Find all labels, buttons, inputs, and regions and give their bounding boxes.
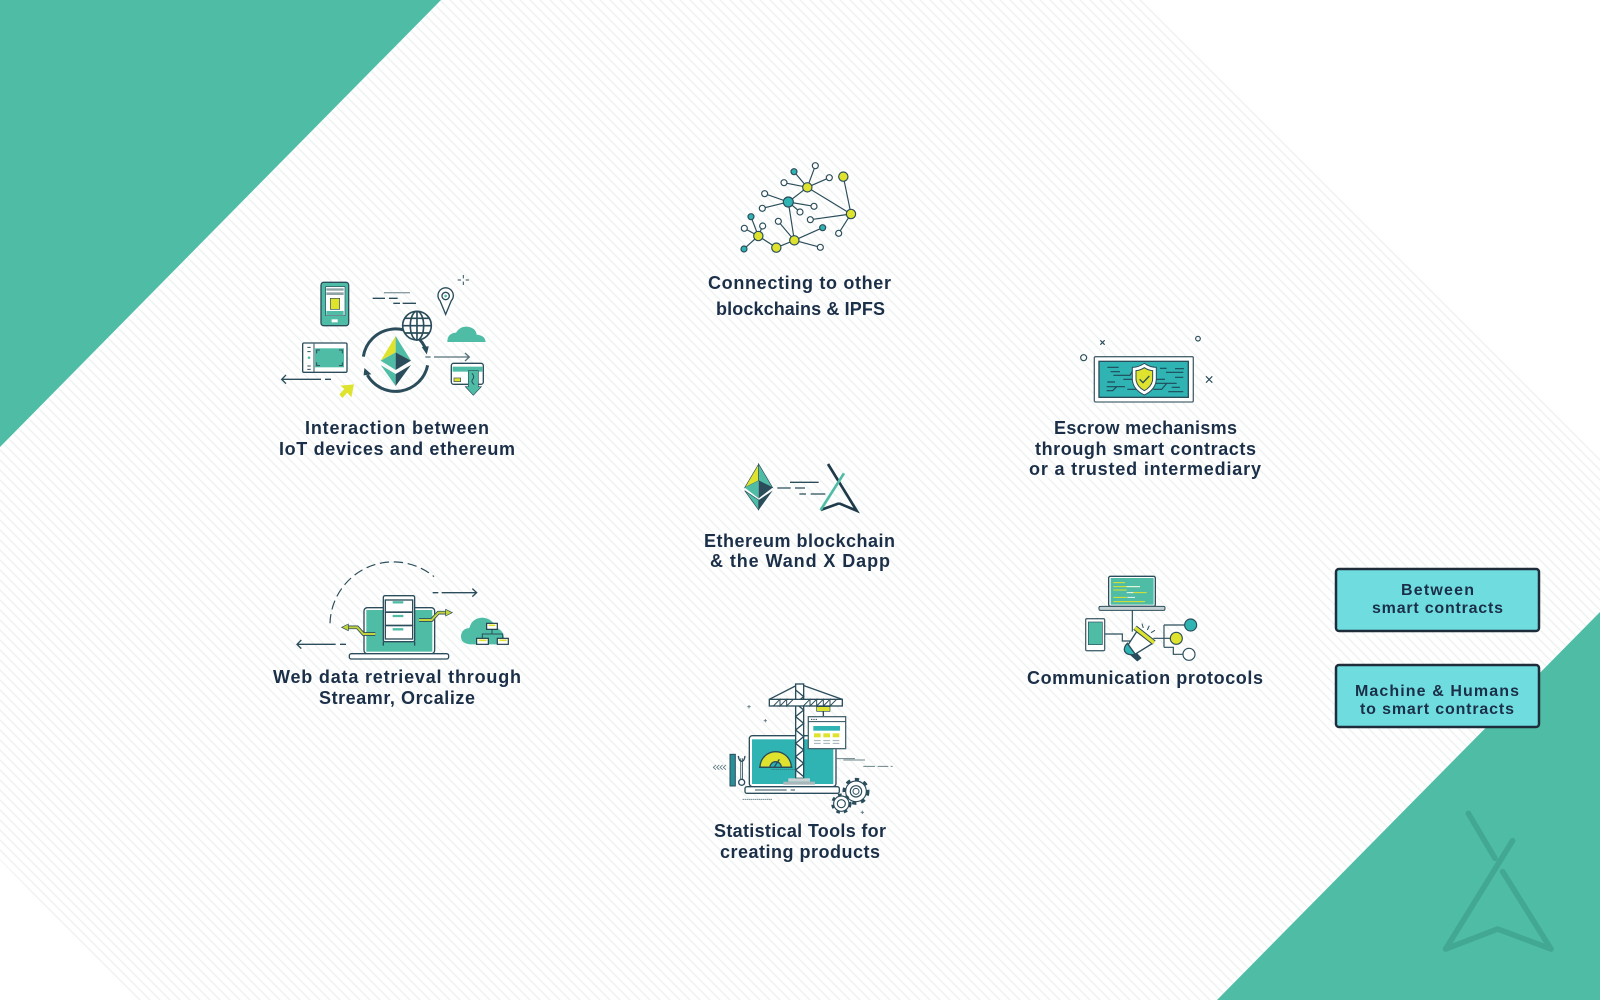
browser window <box>808 717 846 749</box>
text: escrow: Escrow mechanisms <box>1054 418 1237 438</box>
icon: communication protocols <box>1086 576 1197 661</box>
icon: statistical tools <box>713 684 893 814</box>
text: Ethereum blockchain: Ethereum blockchain <box>704 531 895 551</box>
text: IoT interaction: Interaction between <box>305 418 489 438</box>
dashed arc <box>330 562 434 623</box>
speed lines <box>373 293 416 303</box>
text: connecting: Connecting to other <box>708 273 891 293</box>
text: connecting: blockchains & IPFS <box>716 299 885 319</box>
ethereum diamond <box>745 464 773 510</box>
watermark logo <box>1446 813 1551 949</box>
file cabinet <box>383 596 415 646</box>
olive arrows <box>342 609 452 634</box>
icon: web data retrieval <box>297 562 508 659</box>
Wand X logo <box>821 464 857 511</box>
yellow arrow <box>339 384 354 398</box>
edges <box>744 166 851 249</box>
icon: IoT and ethereum <box>282 275 486 398</box>
text: IoT interaction: IoT devices and ethereum <box>279 439 515 459</box>
box: between smart contracts: smart contracts <box>1372 600 1503 617</box>
text: statistical tools: Statistical Tools for <box>714 821 886 841</box>
text: Ethereum blockchain: & the Wand X Dapp <box>710 551 890 571</box>
text: connecting <box>708 273 891 319</box>
text: web data: Streamr, Orcalize <box>319 688 475 708</box>
phone <box>321 282 349 326</box>
card <box>451 363 483 395</box>
connector lines <box>1105 610 1185 654</box>
corner triangle: bottom right <box>1217 612 1600 1000</box>
box: between smart contracts: Between <box>1401 582 1474 599</box>
box: machine and humans: to smart contracts <box>1360 701 1514 718</box>
text: web data: Web data retrieval through <box>273 667 521 687</box>
text: escrow: or a trusted intermediary <box>1029 459 1261 479</box>
globe <box>403 311 431 340</box>
cloud with chart <box>461 618 508 644</box>
icon: ethereum and Wand X <box>745 464 857 511</box>
phone <box>1086 619 1105 651</box>
decorations <box>1081 336 1212 383</box>
gauge <box>759 752 797 769</box>
text: IoT interaction <box>279 418 515 459</box>
lines and marks <box>837 759 893 766</box>
text: escrow <box>1029 418 1261 479</box>
gears <box>832 779 868 813</box>
text: web data <box>273 667 521 708</box>
location pin <box>438 288 453 314</box>
megaphone <box>1124 624 1155 661</box>
box: machine and humans <box>1336 665 1539 727</box>
box: machine and humans: Machine & Humans <box>1355 683 1519 700</box>
circles <box>1170 619 1197 660</box>
device <box>303 343 347 372</box>
text: Ethereum blockchain <box>704 531 895 571</box>
laptop <box>349 608 449 659</box>
laptop <box>745 736 839 793</box>
cloud <box>447 327 486 342</box>
circular arrows <box>363 329 428 391</box>
icon: escrow shield <box>1081 336 1212 402</box>
text: statistical tools <box>714 821 886 862</box>
left arrow <box>282 375 331 384</box>
shield <box>1132 363 1156 395</box>
sparkle <box>458 275 469 285</box>
speed lines <box>777 482 825 494</box>
ethereum diamond <box>381 336 411 386</box>
left arrow <box>297 640 346 649</box>
laptop <box>1099 576 1165 610</box>
crane <box>769 684 842 785</box>
icon: blockchain network <box>741 163 856 252</box>
box: between smart contracts <box>1336 569 1539 631</box>
text: escrow: through smart contracts <box>1035 439 1256 459</box>
board <box>1094 357 1193 402</box>
right arrow <box>433 589 477 597</box>
text: statistical tools: creating products <box>720 842 880 862</box>
nodes <box>741 163 856 252</box>
text: communication: Communication protocols <box>1027 668 1263 688</box>
ruler and wrench <box>713 754 745 786</box>
right arrow <box>425 353 469 361</box>
corner triangle: top left <box>0 0 441 447</box>
